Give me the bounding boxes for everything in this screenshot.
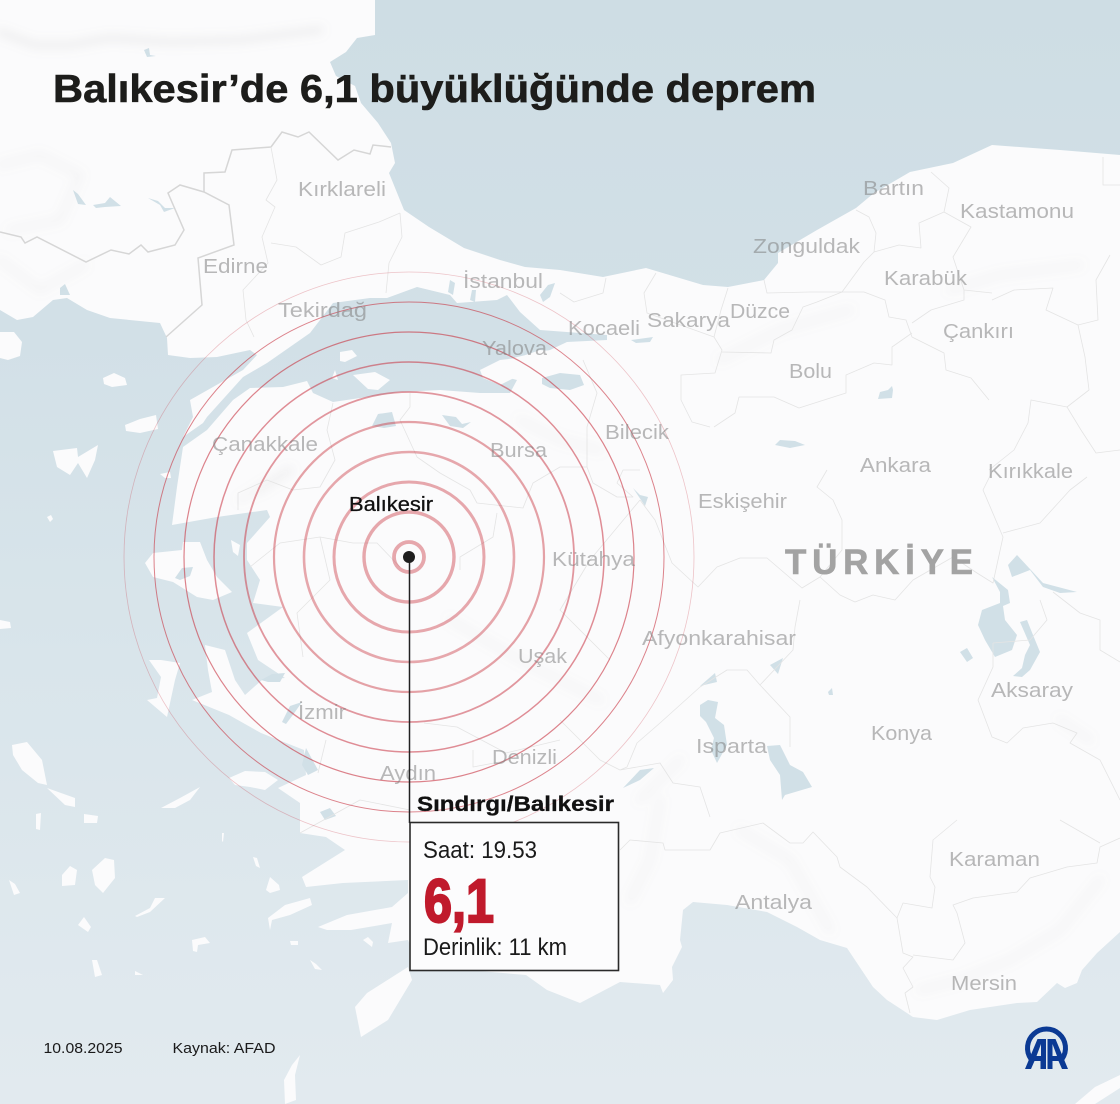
label: Mersin: Mersin (951, 973, 1017, 995)
label: Karaman: Karaman (949, 849, 1040, 871)
label: Bolu: Bolu (789, 361, 832, 383)
city labels (203, 178, 1074, 995)
label: Çanakkale: Çanakkale (212, 434, 318, 456)
label: Bartın: Bartın (863, 178, 924, 200)
label: Kırklareli: Kırklareli (298, 179, 386, 201)
leader line from epicentre to callout (408, 557, 410, 823)
label: Kocaeli: Kocaeli (568, 318, 640, 340)
title: Balıkesir’de 6,1 büyüklüğünde deprem (53, 68, 816, 111)
label: Afyonkarahisar: Afyonkarahisar (642, 628, 796, 650)
callout panel (410, 822, 618, 970)
callout heading: Sındırgı/Balıkesir: Sındırgı/Balıkesir (417, 793, 614, 816)
label: Tekirdağ: Tekirdağ (278, 300, 367, 322)
label: Isparta: Isparta (696, 736, 768, 758)
label: Aydın: Aydın (380, 763, 436, 785)
label: Bursa: Bursa (490, 440, 548, 462)
label: Antalya: Antalya (735, 892, 813, 914)
label: Yalova: Yalova (482, 338, 548, 360)
footer: source: Kaynak: AFAD (172, 1040, 276, 1057)
label: Kütahya: Kütahya (552, 549, 636, 571)
label: Bilecik: Bilecik (605, 422, 670, 444)
label: Sakarya: Sakarya (647, 310, 731, 332)
country label: Türkiye: TÜRKİYE (785, 543, 973, 582)
label: Uşak: Uşak (518, 646, 568, 668)
callout: time: Saat: 19.53 (423, 837, 537, 864)
label: Konya: Konya (871, 723, 933, 745)
label: Ankara: Ankara (860, 455, 932, 477)
label: Çankırı: Çankırı (943, 321, 1014, 343)
label: Denizli: Denizli (492, 747, 557, 769)
inland lakes and gulfs (60, 48, 1077, 820)
label: Aksaray: Aksaray (991, 680, 1073, 702)
land: Aegean and Marmara islands (0, 332, 1120, 1104)
province borders (238, 147, 1120, 1013)
callout: depth: Derinlik: 11 km (423, 934, 567, 961)
label: Karabük: Karabük (884, 268, 968, 290)
epicentre marker (403, 551, 415, 563)
label: Eskişehir: Eskişehir (698, 491, 787, 513)
label: Kastamonu: Kastamonu (960, 201, 1074, 223)
label: İstanbul: İstanbul (463, 270, 543, 293)
epicentre city label: Balıkesir: Balıkesir (349, 494, 433, 516)
callout: magnitude: 6,1 (424, 867, 494, 935)
country borders (0, 132, 391, 337)
label: Düzce: Düzce (730, 301, 790, 323)
earthquake intensity rings (124, 272, 694, 842)
footer: date: 10.08.2025 (44, 1040, 122, 1057)
label: Edirne: Edirne (203, 256, 268, 278)
label: İzmir: İzmir (298, 701, 346, 724)
label: Zonguldak: Zonguldak (753, 236, 861, 258)
icon: AA logo (1025, 1029, 1068, 1069)
label: Kırıkkale: Kırıkkale (988, 461, 1073, 483)
